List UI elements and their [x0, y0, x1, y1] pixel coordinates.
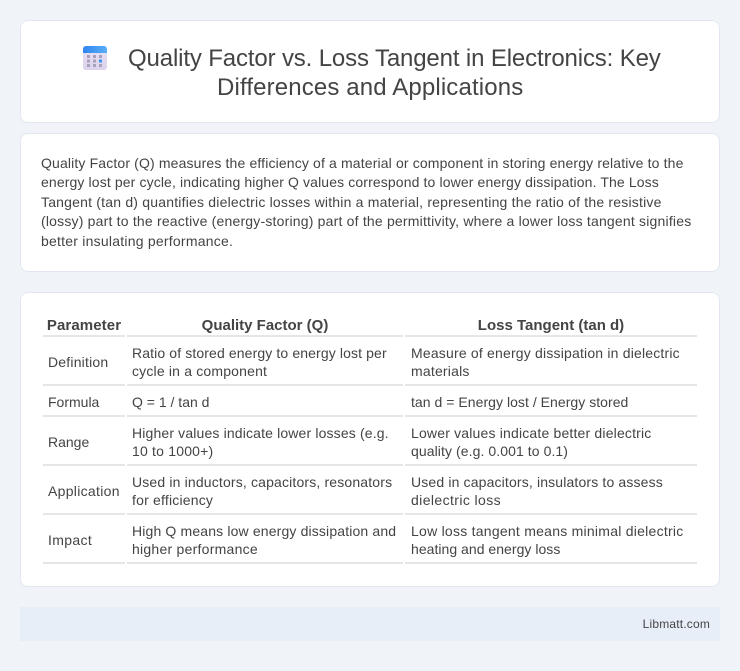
row: definition: Definition: [48, 354, 108, 370]
panel: introduction: [20, 133, 720, 272]
row: application: Used in capacitors, insulators to assess: [411, 474, 663, 490]
row: definition: Ratio of stored energy to energy lost per: [132, 345, 387, 361]
text block: introduction: (lossy) part to the reactive (energy-storing) part of the permittivity, where a lower loss tangent signifies: [41, 213, 691, 229]
row: impact: Impact: [48, 532, 92, 548]
table header: [47, 317, 624, 334]
row: impact: heating and energy loss: [411, 541, 560, 557]
row: range: Lower values indicate better dielectric: [411, 425, 651, 441]
text block: introduction: Tangent (tan d) quantifies dielectric losses within a material, representing the ratio of the resistive: [41, 194, 662, 210]
table header: Parameter: [47, 317, 121, 334]
row: range: [48, 425, 651, 459]
text block: introduction: better insulating performance.: [41, 233, 233, 249]
row: range: 10 to 1000+): [132, 443, 213, 459]
row: impact: [48, 523, 683, 557]
row: formula: tan d = Energy lost / Energy stored: [411, 394, 628, 410]
row: application: for efficiency: [132, 492, 213, 508]
row: application: Application: [48, 483, 120, 499]
row: formula: Formula: [48, 394, 99, 410]
panel: comparison table: [20, 292, 720, 587]
row: definition: Measure of energy dissipation in dielectric: [411, 345, 680, 361]
row: impact: Low loss tangent means minimal dielectric: [411, 523, 683, 539]
row: application: Used in inductors, capacitors, resonators: [132, 474, 392, 490]
row: impact: High Q means low energy dissipation and: [132, 523, 396, 539]
icon: calendar grid: [83, 46, 107, 70]
row: impact: higher performance: [132, 541, 258, 557]
panel: title card: [20, 20, 720, 123]
text block: introduction: Quality Factor (Q) measures the efficiency of a material or component in storing energy relative to the: [41, 155, 684, 171]
row: range: Range: [48, 434, 89, 450]
title: Quality Factor vs. Loss Tangent in Electronics: Key: [128, 45, 661, 72]
row: application: [48, 474, 663, 508]
footer: [20, 607, 720, 641]
row: definition: materials: [411, 363, 470, 379]
title: Differences and Applications: [217, 74, 523, 101]
row: range: Higher values indicate lower losses (e.g.: [132, 425, 389, 441]
row: range: quality (e.g. 0.001 to 0.1): [411, 443, 568, 459]
row: formula: Q = 1 / tan d: [132, 394, 209, 410]
title: [128, 45, 661, 101]
text block: introduction: [41, 155, 691, 249]
row: application: dielectric loss: [411, 492, 501, 508]
footer text: Libmatt.com: [643, 617, 710, 631]
table header: Loss Tangent (tan d): [478, 317, 624, 334]
row: definition: [48, 345, 680, 379]
table header: Quality Factor (Q): [202, 317, 328, 334]
row: formula: [48, 394, 628, 410]
text block: introduction: energy lost per cycle, indicating higher Q values correspond to lower energy dissipation. The Loss: [41, 174, 659, 190]
row: definition: cycle in a component: [132, 363, 267, 379]
